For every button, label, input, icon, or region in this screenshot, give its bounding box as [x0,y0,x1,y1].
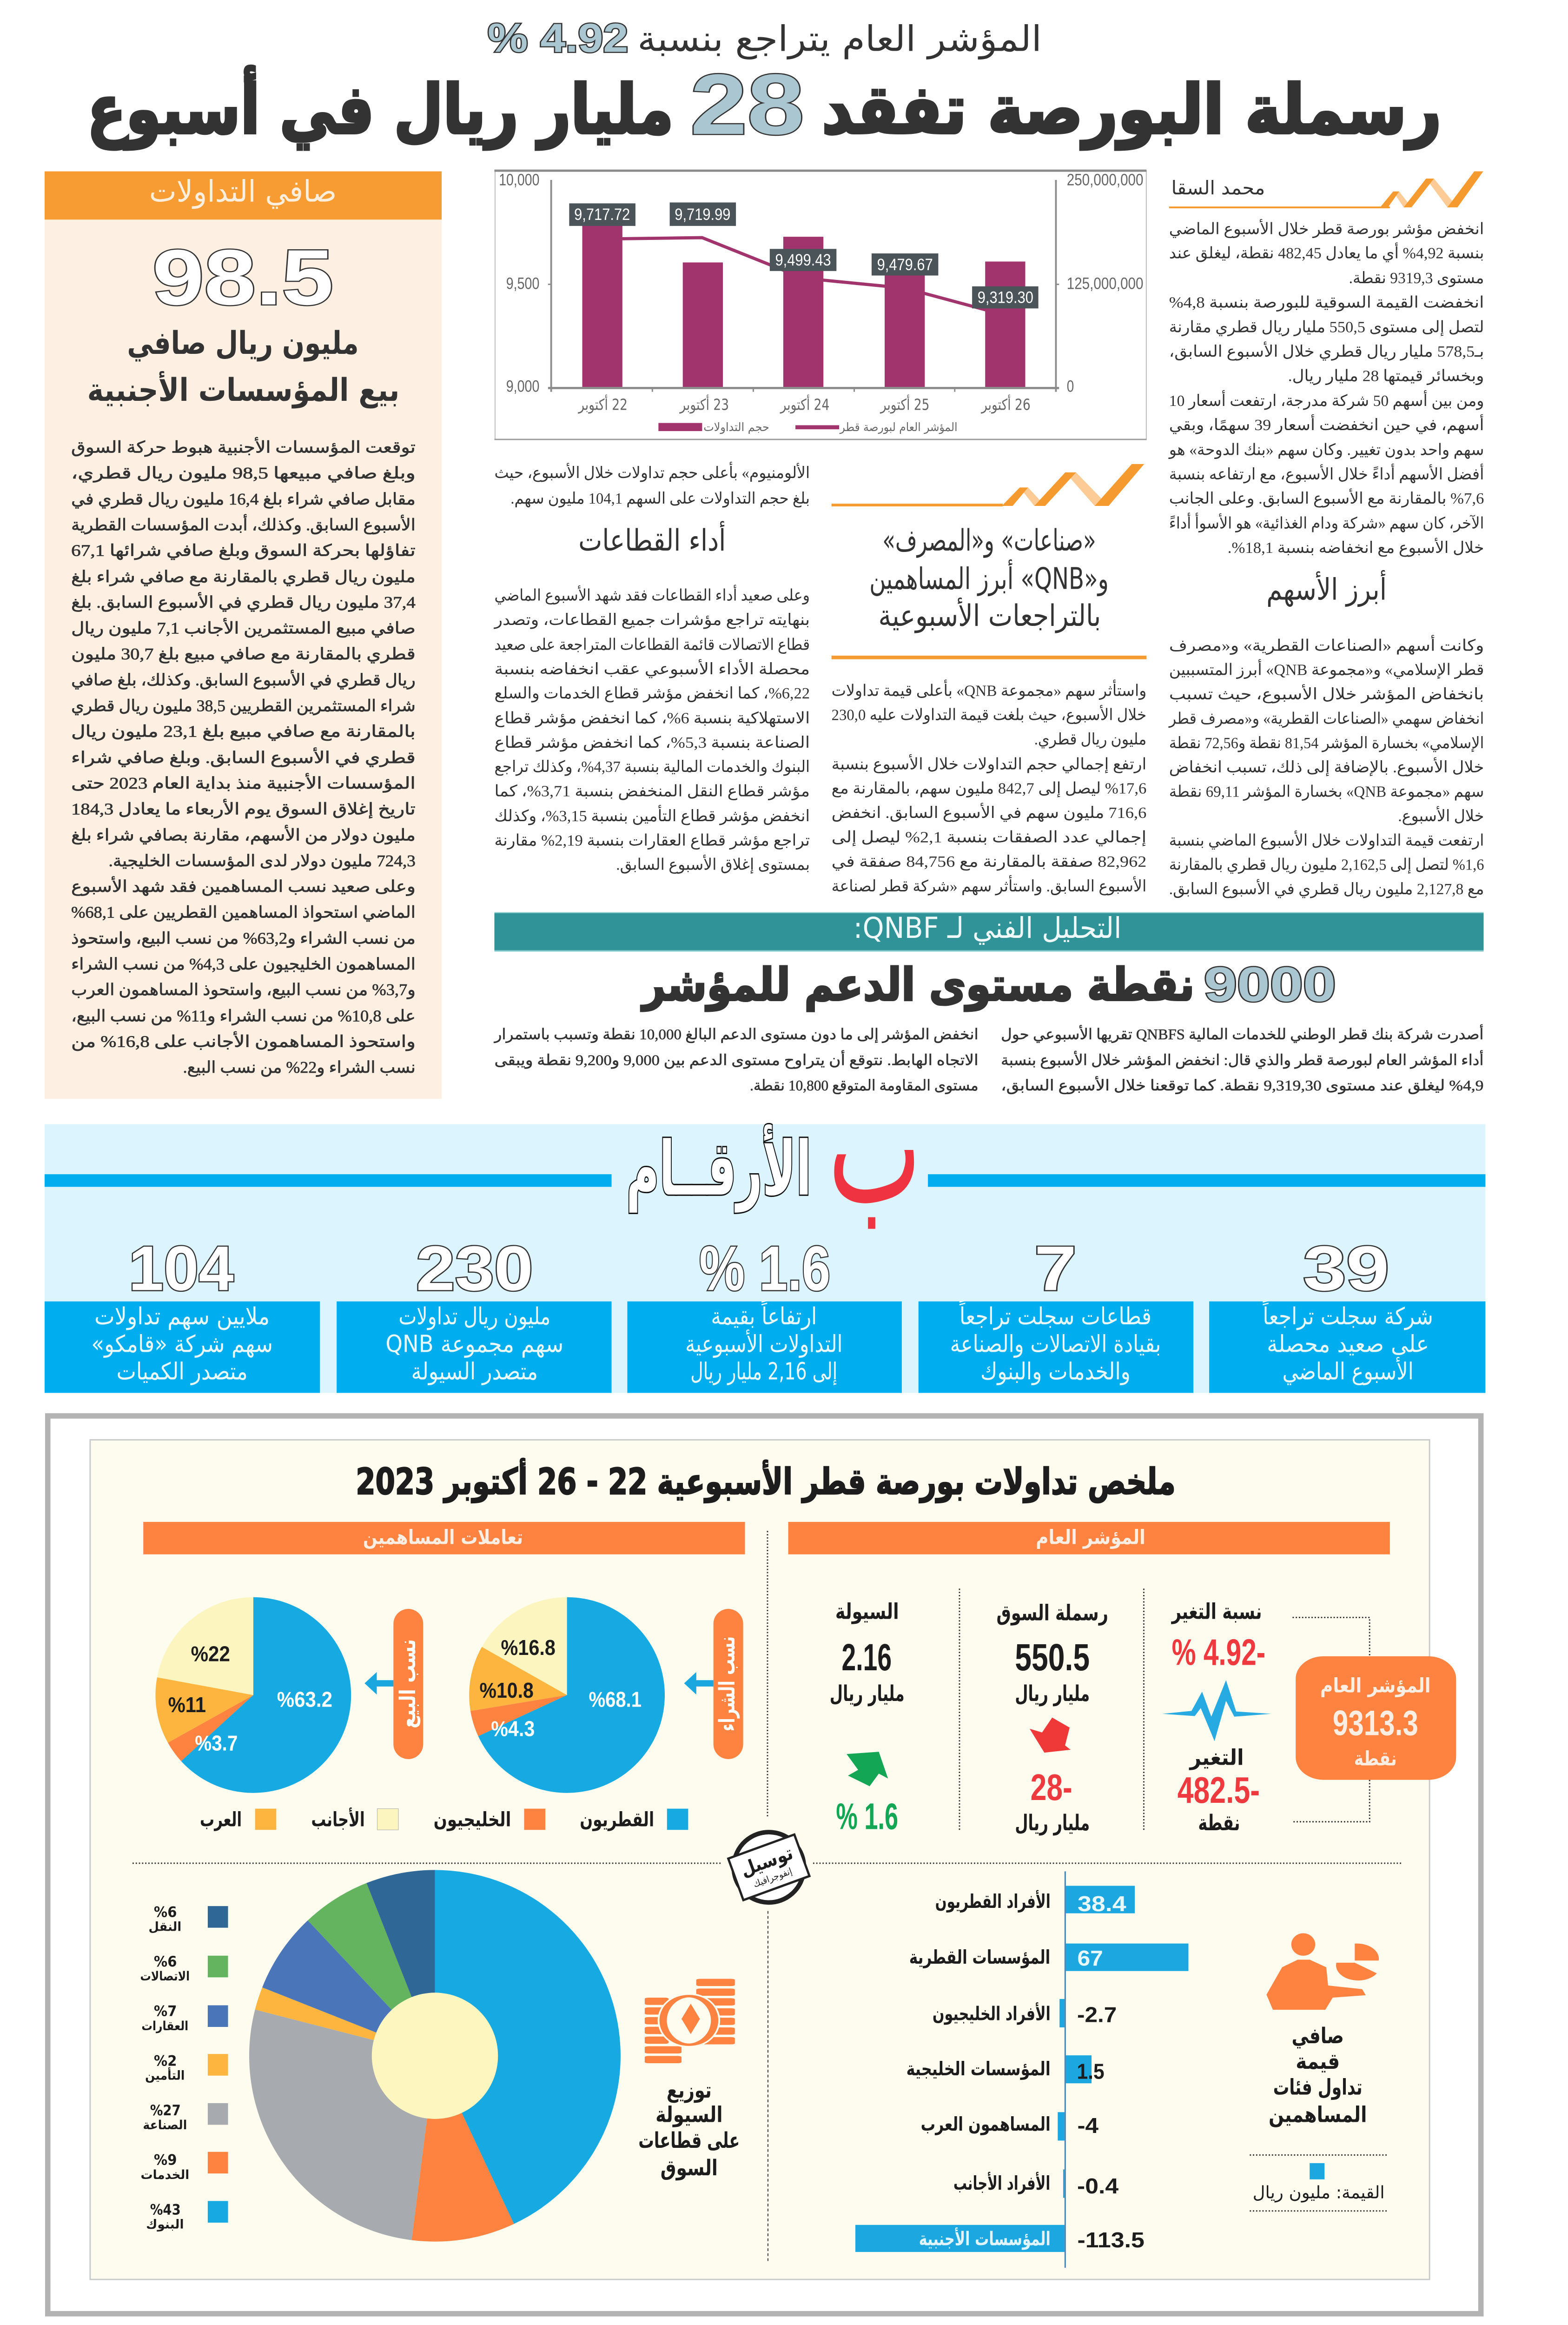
column: change: نسبة التغير [1171,1599,1262,1624]
icon: businessman with pie [1266,1933,1379,2010]
stat box: trading value rise [627,1300,902,1393]
article: top stocks: سهم «مجموعة QNB» بخسارة المؤشر 69,11 نقطة [1169,784,1484,801]
column: change: نقطة [1198,1810,1240,1835]
column: liquidity: السيولة [835,1599,899,1624]
values: -0.4 [1077,2174,1118,2198]
panel: by the numbers [45,1055,1485,1393]
byline [1169,172,1483,208]
stat box: sectors: والخدمات والبنوك [980,1357,1131,1385]
article: QNBFS outlook: الاتجاه الهابط. نتوقع أن يتراوح مستوى الدعم بين 9,000 و9,200 نقطة ويبقى [495,1050,979,1069]
chart data labels: 9,499.43 [775,251,831,269]
bar chart key [1253,2163,1385,2203]
column: market cap: رسملة السوق [996,1600,1108,1626]
header bar: shareholder dealings: تعاملات المساهمين [363,1526,523,1549]
column: market cap: مليار ريال [1015,1810,1090,1835]
article: index overview: بنسبة 4,92% أي ما يعادل 482,45 نقطة، ليغلق عند [1169,243,1484,263]
column: liquidity: مليار ريال [830,1681,905,1706]
panel body text: وبلغ صافي مبيعها 98,5 مليون ريال قطري، [71,464,416,483]
donut legend [140,1904,228,2232]
article: QNBFS report: ؜4,9% ليغلق عند مستوى 9,319,30 نقطة. كما توقعنا خلال الأسبوع السابق، [1001,1076,1483,1094]
article: index overview: أفضل الأسهم أداءً خلال الأسبوع، مع ارتفاعه بنسبة [1169,464,1484,484]
donut legend: الصناعة [143,2118,187,2132]
pill: sell ratios [393,1609,423,1759]
chart legend: المؤشر العام لبورصة قطر [839,420,958,434]
article: trading values: واستأثر سهم «مجموعة QNB» بأعلى قيمة تداولات [832,679,1146,700]
article: sectors: انخفض مؤشر قطاع التأمين بنسبة 3,15%، وكذلك [495,805,810,825]
values [1077,1892,1145,2252]
donut legend: %43 [150,2201,181,2218]
panel body text: ريال قطري في الأسبوع السابق. وكذلك، بلغ صافي [71,670,416,690]
icon: up arrow [847,1752,888,1786]
column: liquidity: 2.16 [841,1636,892,1679]
icon: coins [645,1979,735,2063]
panel body text: وعلى صعيد نسب المساهمين فقد شهد الأسبوع [71,876,416,896]
bar chart key: القيمة: مليون ريال [1253,2182,1385,2203]
article: sectors: محصلة الأداء الأسبوعي عقب انخفاضه بنسبة [495,659,810,678]
text: liquidity distribution label [638,2078,740,2181]
text: net value label [1269,2023,1367,2127]
article: sectors: بنهايته تراجع مؤشرات جميع القطاعات، وتصدر [493,611,810,629]
article: sectors: بمستوى إغلاق الأسبوع السابق. [616,855,810,874]
article: trading values: خلال الأسبوع، حيث بلغت قيمة التداولات عليه 230,0 [832,705,1146,724]
panel header [45,172,442,219]
chart axis labels: 0 [1067,378,1074,396]
values: -113.5 [1078,2228,1145,2252]
article: top stocks [1168,635,1484,898]
panel body text: و3,7% من نسب البيع، واستحوذ المساهمون العرب [71,981,416,999]
text: net value label: صافي [1291,2023,1344,2049]
category labels: الأفراد الخليجيون [933,2002,1051,2025]
panel: trading summary frame [48,1416,1481,2314]
article: index overview: انخفضت القيمة السوقية للبورصة بنسبة 4,8% [1169,294,1484,312]
panel body text: بالمقارنة مع صافي مبيع بلغ 23,1 مليون ريال [71,723,416,741]
panel body text: المؤسسات الأجنبية منذ بداية العام 2023 حتى [71,773,416,793]
article: index overview: لتصل إلى مستوى 550,5 مليار ريال قطري مقارنة [1169,319,1484,337]
text: net value label: المساهمين [1269,2102,1367,2127]
subtitle: المؤشر العام يتراجع بنسبة [637,19,1042,60]
donut legend: العقارات [141,2019,188,2033]
icon: infographic stamp: توسيل [737,1841,796,1881]
donut chart: liquidity by sector [249,1870,621,2242]
panel body text: قطري في الأسبوع السابق. وبلغ صافي شراء [71,747,416,767]
stat numbers: 104 [129,1233,234,1303]
heading: sectors: أداء القطاعات [578,521,726,558]
icon: arrow to sell pie [364,1672,393,1694]
heading: major contributors [832,524,1146,659]
pie chart: sell ratios: %3.7 [195,1731,238,1755]
chart data labels: 9,479.67 [877,256,933,274]
stat box: sectors: بقيادة الاتصالات والصناعة [950,1330,1161,1358]
article: top stocks: ارتفعت قيمة التداولات خلال الأسبوع الماضي بنسبة [1169,830,1484,850]
chart axis labels: 25 أكتوبر [880,394,930,413]
donut legend: %9 [154,2152,177,2169]
chart axis labels: 125,000,000 [1067,275,1144,293]
chart bars [582,216,1025,387]
panel subheading [87,325,399,409]
panel body text: مقابل صافي شراء بلغ 16,4 مليون ريال قطري في [71,490,416,509]
stat box: Qamco volume: متصدر الكميات [117,1357,248,1385]
heading: major contributors: «صناعات» و«المصرف» [882,524,1096,558]
article: trading values: مليون ريال قطري. [1034,731,1146,749]
main title: 28 [690,57,804,153]
heading: top stocks: أبرز الأسهم [1266,570,1387,607]
banner: technical analysis: التحليل الفني لـ QNBF: [853,911,1122,945]
chart: weekly volume and index [495,170,1146,440]
article: top stocks: انخفاض سهمي «الصناعات القطرية» و«مصرف قطر [1168,710,1484,728]
panel body text: من نسب الشراء و63,2% من نسب البيع، واستحوذ [71,930,416,948]
panel body text: قطري بالمقارنة مع صافي مبيع بلغ 30,7 مليون [71,645,416,664]
stat box: trading value rise: إلى 2,16 مليار ريال [690,1357,837,1385]
pie chart: buy ratios: %10.8 [480,1678,534,1702]
section heading [626,1055,922,1239]
stat numbers: 230 [416,1233,533,1303]
donut legend: التأمين [145,2067,185,2083]
panel body text: المساهمون الخليجيون على 4,3% من نسب الشراء [71,955,416,974]
icon: zigzag [832,464,1144,506]
article: sectors: قطاع الاتصالات قائمة القطاعات المتراجعة على صعيد [495,636,810,654]
article: sectors: الصناعة بنسبة 5,3%، كما انخفض مؤشر قطاع [495,734,810,752]
donut legend: البنوك [146,2217,184,2232]
chart axis labels: 23 أكتوبر [679,394,729,413]
values: -2.7 [1077,2002,1117,2026]
category labels: الأفراد القطريون [935,1890,1051,1913]
box: general index value: نقطة [1354,1747,1397,1771]
stat numbers [129,1233,1389,1303]
article: sectors: وعلى صعيد أداء القطاعات فقد شهد الأسبوع الماضي [495,585,810,605]
main title [87,57,1442,153]
values: 67 [1078,1946,1103,1970]
panel body text: تاريخ إغلاق السوق يوم الأربعاء ما يعادل 184,3 [71,798,416,818]
pie chart: buy ratios: %16.8 [501,1635,556,1660]
panel body text: توقعت المؤسسات الأجنبية هبوط حركة السوق [71,437,416,457]
icon: infographic stamp [724,1822,814,1913]
text: net value label: تداول فئات [1273,2074,1363,2100]
chart axes [548,180,1059,392]
stat box: Qamco volume: سهم شركة «قامكو» [91,1330,273,1358]
panel: net trading [45,172,442,1099]
donut legend: %7 [154,2003,177,2020]
article: QNBFS outlook: مستوى المقاومة المتوقع 10,800 نقطة. [750,1077,979,1094]
column: change: % 4.92- [1172,1631,1265,1673]
column: market cap: 28- [1031,1767,1072,1808]
article: aluminium continuation: الألومنيوم» بأعلى حجم تداولات خلال الأسبوع، حيث [495,462,810,482]
stat box: companies: الأسبوع الماضي [1283,1357,1414,1385]
panel body text: الأسبوع السابق. وكذلك، أبدت المؤسسات القطرية [71,514,416,534]
chart axis labels: 10,000 [499,171,539,189]
panel subheading: بيع المؤسسات الأجنبية [87,371,399,409]
article: sectors: الاستهلاكية بنسبة 6%، كما انخفض مؤشر قطاع [495,710,810,727]
article: top stocks: قطر الإسلامي» و«مجموعة QNB» أبرز المتسببين [1169,659,1484,679]
stat numbers: 7 [1034,1233,1077,1303]
stat box: companies: على صعيد محصلة [1267,1330,1429,1357]
chart axis labels: 22 أكتوبر [578,394,628,413]
article: QNBFS report: أداء المؤشر العام لبورصة قطر والذي قال: انخفض المؤشر خلال الأسبوع بنسبة [1001,1050,1483,1069]
header bar: general index [788,1522,1390,1554]
stat box: QNB liquidity: متصدر السيولة [411,1357,538,1385]
article: index overview: وبخسائر قيمتها 28 مليار ريال. [1288,367,1484,385]
text: liquidity distribution label: توزيع [667,2078,712,2103]
article: top stocks: وكانت أسهم «الصناعات القطرية» و«مصرف [1169,635,1484,655]
donut legend: النقل [148,1920,181,1934]
panel body text: 724,3 مليون دولار لدى المؤسسات الخليجية. [109,852,416,870]
panel body text: تفاؤلها بحركة السوق وبلغ صافي شرائها 67,1 [71,542,416,560]
donut legend: الخدمات [140,2168,189,2182]
article: QNBFS outlook: انخفض المؤشر إلى ما دون مستوى الدعم البالغ 10,000 نقطة وتسبب باستمرار [493,1026,979,1043]
article: index overview: مستوى 9319,3 نقطة. [1349,270,1484,287]
pie legend [200,1807,688,1831]
pie chart: sell ratios [155,1597,351,1793]
chart legend [658,420,958,434]
article: trading values: الأسبوع السابق. واستأثر سهم «شركة قطر لصناعة [832,875,1146,896]
article: sectors: مؤشر قطاع النقل المنخفض بنسبة 3,71%، كما [495,783,810,801]
text: liquidity distribution label: السوق [661,2155,718,2181]
box: general index value [1296,1656,1456,1780]
article: sectors: تراجع مؤشر قطاع العقارات بنسبة 2,19% مقارنة [495,832,810,850]
icon: zigzag [1380,172,1483,207]
pie chart: buy ratios: %68.1 [589,1687,642,1711]
stat box: trading value rise: ارتفاعاً بقيمة [711,1300,817,1330]
bar chart: net by investor category [855,1871,1188,2268]
text: net value label: قيمة [1296,2049,1340,2074]
pie chart: sell ratios: %11 [168,1693,206,1717]
article: index overview: ؜7,6% بالمقارنة مع الأسبوع السابق. وعلى الجانب [1169,488,1484,508]
column: change: 482.5- [1178,1769,1260,1811]
article: index overview: ومن بين أسهم 50 شركة مدرجة، ارتفعت أسعار 10 [1169,390,1484,410]
stat box: companies: شركة سجلت تراجعاً [1263,1300,1433,1330]
byline: محمد السقا [1171,177,1265,199]
pie legend: القطريون [580,1808,654,1831]
article: index overview: بـ578,5 مليار ريال قطري خلال الأسبوع السابق، [1169,341,1484,361]
panel body text: الماضي استحواذ المساهمين القطريين على 68,1% [71,903,416,922]
article: QNBFS report: أصدرت شركة بنك قطر الوطني للخدمات المالية QNBFS تقريها الأسبوعي حول [1001,1024,1483,1043]
donut legend: %2 [154,2053,177,2069]
chart axis labels [499,171,1144,413]
chart axis labels: 9,500 [506,275,539,293]
column: change [1163,1599,1271,1835]
chart legend: حجم التداولات [703,420,769,434]
chart axis labels: 250,000,000 [1067,171,1144,189]
stat box: QNB liquidity: سهم مجموعة QNB [385,1330,563,1358]
text: liquidity distribution label: السيولة [655,2102,723,2128]
article: top stocks: خلال الأسبوع. بالإضافة إلى ذلك، تسبب انخفاض [1169,757,1484,777]
header bar: general index: المؤشر العام [1036,1526,1145,1549]
article: index overview: سهم واحد بدون تغيير. وكان سهم «بنك الدوحة» هو [1168,441,1484,459]
chart axis labels: 24 أكتوبر [780,394,829,413]
column: change: التغير [1189,1745,1244,1770]
panel body text: 37,4 مليون ريال قطري في الأسبوع السابق. بلغ [71,592,416,612]
heading: major contributors: و«QNB» أبرز المساهمين [869,559,1109,596]
stat box: companies [1209,1300,1485,1393]
box: general index value: 9313.3 [1333,1704,1418,1743]
main title: رسملة البورصة تفقد [822,71,1442,150]
icon: down arrow [1030,1718,1071,1753]
article: sectors: البنوك والخدمات المالية بنسبة 4,37%، وكذلك تراجع [495,758,810,776]
section heading: ب [828,1055,922,1239]
article: trading values: 82,962 صفقة بالمقارنة مع 84,756 صفقة في [832,853,1146,871]
donut legend: الاتصالات [140,1969,190,1984]
panel body text: نسب الشراء و22% من نسب البيع. [183,1058,416,1077]
chart data labels: 9,719.99 [675,206,731,224]
text: liquidity distribution label: على قطاعات [638,2128,740,2153]
donut legend: %27 [150,2102,181,2119]
section heading: الأرقــام [626,1124,812,1213]
subtitle [488,16,1042,61]
article: index overview: انخفض مؤشر بورصة قطر خلال الأسبوع الماضي [1169,219,1484,238]
values: 1.5 [1077,2059,1105,2084]
category labels [906,1890,1051,2250]
panel body text [71,437,416,1077]
article: aluminium continuation: بلغ حجم التداولات على السهم 104,1 مليون سهم. [510,490,810,508]
stat box: Qamco volume: ملايين سهم تداولات [94,1302,270,1330]
category labels: المساهمون العرب [921,2113,1051,2135]
article: trading values [832,679,1146,896]
article: trading values: 716,6 مليون سهم في الأسبوع السابق. انخفض [832,803,1146,822]
category labels: المؤسسات الأجنبية [919,2227,1051,2250]
stat box: trading value rise: التداولات الأسبوعية [685,1329,842,1358]
big number: 98.5 [152,233,333,321]
pie legend: الأجانب [311,1807,365,1831]
article: trading values: ؜17,6% ليصل إلى 842,7 مليون سهم، بالمقارنة مع [832,780,1146,798]
article: trading values: إجمالي عدد الصفقات بنسبة 2,1% ليصل إلى [832,829,1146,846]
chart line [602,238,1006,315]
summary title: ملخص تداولات بورصة قطر الأسبوعية 22 - 26 أكتوبر 2023 [356,1458,1176,1503]
panel subheading: مليون ريال صافي [127,325,359,362]
stat numbers: % 1.6 [699,1233,830,1303]
values: -4 [1078,2113,1098,2138]
bars [855,1886,1188,2252]
values: 38.4 [1078,1892,1126,1916]
stat box: sectors: قطاعات سجلت تراجعاً [959,1300,1151,1330]
panel body text: مليون دولار من الأسهم، مقارنة بصافي شراء بلغ [71,825,416,845]
chart axis labels: 9,000 [506,378,539,396]
icon: arrow to buy pie [684,1672,714,1694]
panel body text: شراء المستثمرين القطريين 38,5 مليون ريال قطري [71,697,416,715]
panel body text: صافي مبيع المستثمرين الأجانب 7,1 مليون ريال [71,618,416,638]
article: QNBFS report [1001,1024,1483,1094]
pie chart: sell ratios: %63.2 [277,1687,332,1711]
column: market cap: 550.5 [1015,1636,1090,1679]
chart data labels [569,202,1039,308]
article: index overview: الآخر، كان سهم «شركة ودام الغذائية» هو الأسوأ أداءً [1169,513,1484,533]
article: index overview: أسهم، في حين انخفضت أسعار 39 سهمًا، وبقي [1169,414,1484,434]
article: top stocks: خلال الأسبوع. [1398,806,1484,825]
stat box: QNB liquidity: مليون ريال تداولات [398,1302,550,1330]
pie chart: buy ratios [469,1597,665,1793]
icon: infographic stamp: إنفوجرافيك [752,1866,794,1890]
panel body text: على 10,8% من نسب الشراء و11% من نسب البيع، [71,1007,416,1025]
article: trading values: ارتفع إجمالي حجم التداولات خلال الأسبوع بنسبة [832,754,1146,773]
category labels: المؤسسات القطرية [909,1946,1050,1968]
box: general index value: المؤشر العام [1320,1674,1431,1697]
main title: مليار ريال في أسبوع [87,66,674,150]
icon: pulse [1163,1680,1271,1741]
header bar: shareholder dealings [143,1522,745,1554]
banner: technical analysis [495,911,1483,951]
category labels: المؤسسات الخليجية [906,2058,1051,2080]
article: top stocks: الإسلامي» بخسارة المؤشر 81,54 نقطة و72,56 نقطة [1169,735,1484,752]
pill: sell ratios: نسب البيع [395,1639,420,1728]
category labels: الأفراد الأجانب [953,2172,1050,2194]
pie legend: الخليجيون [434,1808,511,1831]
pill: buy ratios [714,1609,743,1759]
chart data labels: 9,717.72 [574,206,630,224]
article: top stocks: مع 2,127,8 مليون ريال قطري في الأسبوع السابق. [1169,879,1484,898]
subtitle: % 4.92 [488,16,628,61]
donut legend: %6 [154,1953,177,1970]
column: liquidity [830,1599,905,1837]
article: sectors: ؜6,22%، كما انخفض مؤشر قطاع الخدمات والسلع [495,685,810,703]
heading: 9000 support level: 9000 [1204,957,1336,1012]
pill: buy ratios: نسب الشراء [715,1636,740,1731]
panel header: صافي التداولات [149,174,337,209]
stat box: QNB liquidity [337,1302,612,1393]
column: liquidity: % 1.6 [836,1795,898,1837]
donut legend: %6 [154,1904,177,1920]
article: top stocks: ؜1,6% لتصل إلى 2,162,5 مليون ريال قطري بالمقارنة [1169,857,1484,874]
stat numbers: 39 [1303,1233,1389,1303]
chart axis labels: 26 أكتوبر [980,394,1031,413]
article: QNBFS outlook [493,1026,979,1094]
stat box: sectors [919,1300,1193,1393]
article: top stocks: بانخفاض المؤشر خلال الأسبوع، حيث تسبب [1169,684,1484,704]
panel body text: مليون ريال قطري بالمقارنة مع صافي شراء بلغ [71,568,416,586]
panel body text: واستحوذ المساهمون الأجانب على 16,8% من [71,1031,416,1051]
article: index overview [1168,219,1484,557]
stat box: Qamco volume [45,1302,320,1393]
heading: major contributors: بالتراجعات الأسبوعية [878,597,1101,633]
chart data labels: 9,319.30 [978,289,1033,307]
column: market cap [996,1600,1108,1835]
column: market cap: مليار ريال [1015,1681,1090,1706]
pie chart: buy ratios: %4.3 [491,1717,535,1741]
article: aluminium continuation [495,462,810,508]
pie legend: العرب [200,1808,242,1831]
heading: 9000 support level: نقطة مستوى الدعم للمؤشر [641,958,1195,1011]
article: sectors [493,585,810,874]
pie chart: sell ratios: %22 [191,1642,230,1666]
article: index overview: خلال الأسبوع مع انخفاضه بنسبة 18,1%. [1228,538,1484,557]
